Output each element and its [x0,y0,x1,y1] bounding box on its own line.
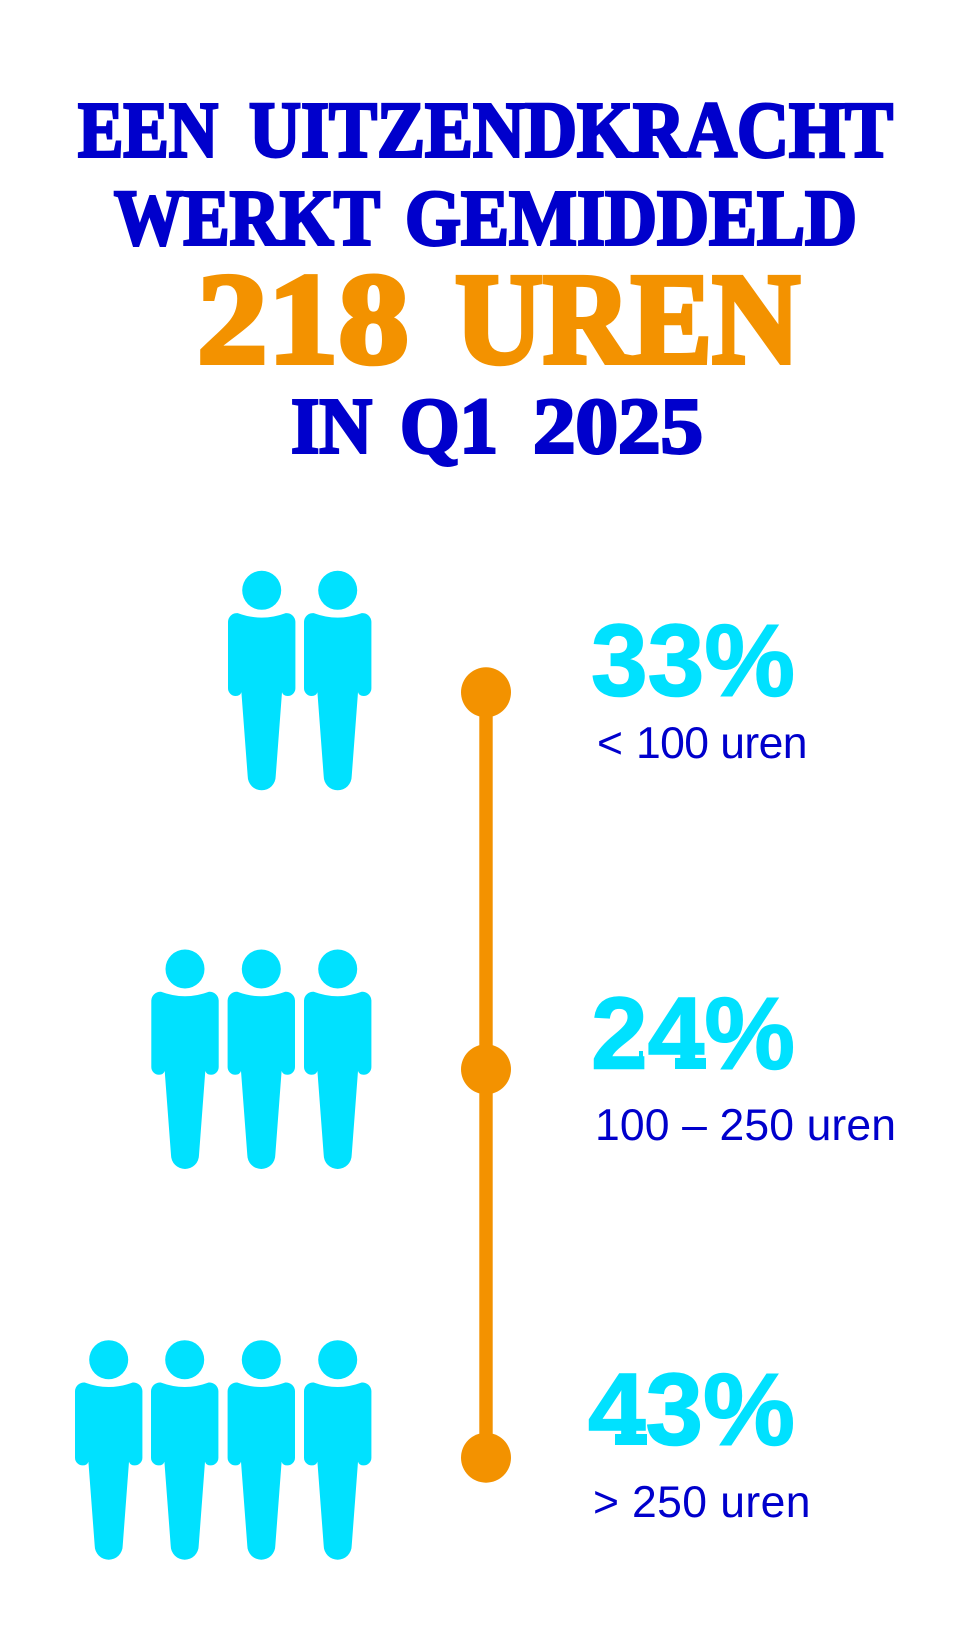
title [78,88,893,470]
title line 4 [291,384,703,470]
label: less than 100 hours: < [597,719,623,768]
title line 2: GEMIDDELD [405,176,857,262]
title line 4: Q1 [400,384,498,470]
highlighted figure: 218 uren: UREN [455,248,800,392]
label: less than 100 hours: 100 uren [636,719,807,768]
title line 2: WERKT [114,176,380,262]
icon group: 2 people, row 1 [228,571,371,790]
timeline [461,667,511,1483]
highlighted figure: 218 uren [197,248,800,392]
label: 100 to 250 hours: 100 – 250 uren [595,1101,896,1150]
stat: 43%: 43% [588,1352,795,1466]
title line 2 [114,176,857,262]
title line 4: IN [291,384,372,470]
icon group: 4 people, row 3 [75,1340,371,1560]
title line 4: 2025 [533,384,703,470]
label: more than 250 hours: > [593,1478,619,1527]
title line 1: EEN [78,88,218,174]
highlighted figure: 218 uren: 218 [197,248,409,392]
title line 1: UITZENDKRACHT [249,88,893,174]
stat: 24%: 24% [591,976,795,1090]
label: more than 250 hours: 250 uren [632,1478,811,1527]
icon group: 3 people, row 2 [151,950,371,1169]
stat: 33%: 33% [591,604,795,718]
